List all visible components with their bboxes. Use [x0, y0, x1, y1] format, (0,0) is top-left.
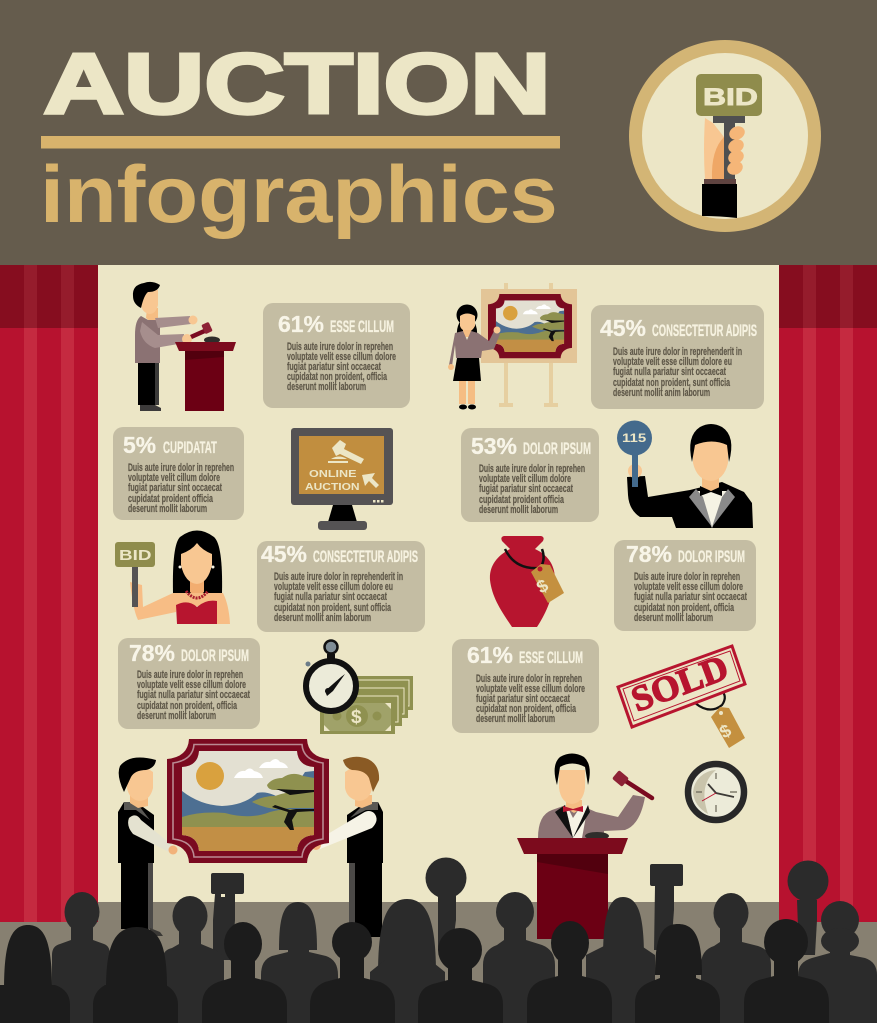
body text: cupidatat non proident, officia: [287, 371, 388, 383]
illustration: sold stamp with price tag: [618, 646, 745, 748]
icon: hand holding bid paddle in circle: [629, 40, 821, 232]
percentage: 78%: [626, 541, 672, 567]
body text: [128, 462, 234, 515]
spectator: [163, 896, 224, 1023]
body text: deserunt mollit laborum: [128, 503, 207, 515]
spectator: [744, 919, 829, 1023]
illustration: woman in red dress holding bid sign: BID: [119, 547, 151, 563]
body text: fugiat nulla pariatur sint occaecat: [274, 591, 387, 603]
body text: fugiat pariatur sint occaecat: [476, 693, 570, 705]
spectator: [202, 922, 287, 1023]
stage wall background: [0, 265, 877, 1023]
illustration: stopwatch and money: [306, 640, 413, 734]
percentage: 45%: [600, 315, 646, 341]
panel: 61% esse cillum lower: [452, 639, 599, 733]
woman figure: [448, 304, 500, 410]
subtitle: infographics: infographics: [40, 149, 558, 239]
percentage: 5%: [123, 432, 156, 458]
large painting: [167, 739, 329, 863]
body text: Duis aute irure dolor in reprehen: [479, 463, 585, 475]
body text: cupidatat non proident, sunt officia: [613, 377, 731, 389]
illustration: woman presenting painting on easel: [448, 283, 577, 410]
spectator: [261, 902, 338, 1023]
spectator: [701, 893, 771, 1023]
percentage: 61%: [278, 311, 324, 337]
body text: [287, 341, 396, 393]
body text: Duis aute irure dolor in reprehen: [137, 669, 243, 681]
panel heading: DOLOR IPSUM: [678, 547, 745, 566]
body text: [634, 571, 747, 624]
panel heading: CONSECTETUR ADIPIS: [652, 321, 757, 340]
spectator: [0, 925, 70, 1023]
left curtain: [0, 265, 98, 922]
left man: [118, 758, 178, 936]
panel: 78% dolor ipsum right: [614, 540, 756, 631]
panel heading: CONSECTETUR ADIPIS: [313, 547, 418, 566]
spectator: [310, 922, 395, 1023]
spectator: [635, 924, 720, 1023]
illustration: sold stamp with price tag: SOLD: [626, 647, 733, 719]
body text: [613, 346, 742, 399]
spectator: [586, 897, 655, 1023]
body text: Duis aute irure dolor in reprehen: [634, 571, 740, 583]
raised round paddle centre: [426, 858, 466, 950]
illustration: online auction monitor: ONLINE: [309, 469, 357, 480]
body text: fugiat nulla pariatur sint occaecat: [634, 591, 747, 603]
illustration: two men holding large painting: [118, 739, 383, 937]
body text: voluptate velit esse cillum dolore eu: [613, 356, 732, 368]
body text: voluptate velit esse cillum dolore: [287, 351, 396, 363]
body text: deserunt mollit laborum: [476, 713, 555, 725]
body text: deserunt mollit laborum: [479, 504, 558, 516]
body text: cupidatat non proident, officia: [476, 703, 577, 715]
body text: Duis aute irure dolor in reprehenderit in: [613, 346, 742, 358]
body text: voluptate velit esse cillum dolore: [137, 679, 246, 691]
spectator: [483, 892, 555, 1023]
panel heading: DOLOR IPSUM: [181, 646, 249, 665]
audience: back row silhouettes: [52, 858, 877, 1023]
spectator: [527, 921, 612, 1023]
raised round paddle right: [788, 860, 828, 955]
percentage: 78%: [129, 640, 175, 666]
illustration: auctioneer at podium with gavel: [133, 282, 236, 411]
panel heading: CUPIDATAT: [163, 438, 217, 457]
illustration: bidder in tuxedo raising paddle 115: 115: [622, 431, 647, 445]
illustration: red vase with price tag: [490, 536, 564, 627]
illustration: red vase with price tag: $: [533, 575, 552, 597]
panel heading: ESSE CILLUM: [330, 317, 394, 336]
body text: Duis aute irure dolor in reprehen: [476, 673, 582, 685]
body text: [274, 571, 403, 624]
body text: voluptate velit esse cillum dolore eu: [274, 581, 393, 593]
illustration: bidder in tuxedo raising paddle 115: [617, 420, 753, 528]
body text: cupidatat proident officia: [128, 493, 214, 505]
body text: voluptate velit esse cillum dolore: [476, 683, 585, 695]
audience: front row silhouettes: [0, 919, 829, 1023]
percentage: 45%: [261, 541, 307, 567]
body text: Duis aute irure dolor in reprehen: [287, 341, 393, 353]
floor: [0, 902, 877, 1023]
body text: Duis aute irure dolor in reprehenderit in: [274, 571, 403, 583]
body text: fugiat nulla pariatur sint occaecat: [613, 366, 726, 378]
title: AUCTION: AUCTION: [44, 36, 551, 131]
illustration: sold stamp with price tag: $: [716, 720, 735, 742]
body text: deserunt mollit laborum: [287, 381, 366, 393]
percentage: 61%: [467, 642, 513, 668]
body text: fugiat pariatur sint occaecat: [287, 361, 381, 373]
body text: deserunt mollit laborum: [634, 612, 713, 624]
raised square paddle left: [211, 873, 244, 960]
body text: [137, 669, 250, 722]
illustration: online auction monitor: AUCTION: [305, 482, 360, 493]
panel heading: DOLOR IPSUM: [523, 439, 591, 458]
body text: fugiat nulla pariatur sint occaecat: [137, 689, 250, 701]
spectator: [798, 901, 877, 1023]
illustration: auctioneer at front podium with raised gavel: [517, 754, 652, 939]
icon: hand holding bid paddle in circle: BID: [703, 83, 758, 111]
spectator: [52, 892, 110, 1023]
small painting: [488, 294, 572, 358]
right man: [311, 757, 383, 937]
body text: cupidatat proident officia: [479, 494, 565, 506]
right curtain: [779, 265, 877, 922]
body text: deserunt mollit anim laborum: [274, 612, 371, 624]
spectator: [370, 899, 445, 1023]
illustration: online auction monitor: [291, 428, 393, 530]
panel: 78% dolor ipsum left: [118, 638, 260, 729]
body text: fugiat pariatur sint occaecat: [128, 482, 222, 494]
body text: voluptate velit cillum dolore: [479, 473, 571, 485]
percentage: 53%: [471, 433, 517, 459]
body text: cupidatat non proident, officia: [137, 700, 238, 712]
panel: 5% cupidatat: [113, 427, 244, 520]
body text: cupidatat non proident, officia: [634, 602, 735, 614]
body text: [479, 463, 585, 516]
illustration: stopwatch and money: $: [351, 707, 362, 728]
body text: voluptate velit cillum dolore: [128, 472, 220, 484]
panel: 45% consectetur adipis middle: [257, 541, 425, 632]
spectator: [93, 927, 178, 1023]
body text: deserunt mollit laborum: [137, 710, 216, 722]
spectator: [418, 928, 503, 1023]
body text: Duis aute irure dolor in reprehen: [128, 462, 234, 474]
body text: voluptate velit esse cillum dolore: [634, 581, 743, 593]
raised square paddle right: [650, 864, 683, 950]
body text: [476, 673, 585, 725]
body text: deserunt mollit anim laborum: [613, 387, 710, 399]
panel heading: ESSE CILLUM: [519, 648, 583, 667]
panel: 53% dolor ipsum: [461, 428, 599, 522]
header banner: [0, 0, 877, 265]
body text: fugiat pariatur sint occaecat: [479, 483, 573, 495]
title rule: [41, 136, 560, 148]
illustration: woman in red dress holding bid sign: [115, 530, 230, 624]
body text: cupidatat non proident, sunt officia: [274, 602, 392, 614]
panel: 45% consectetur adipis: [591, 305, 764, 409]
illustration: wall clock: [688, 764, 744, 820]
panel: 61% esse cillum: [263, 303, 410, 408]
